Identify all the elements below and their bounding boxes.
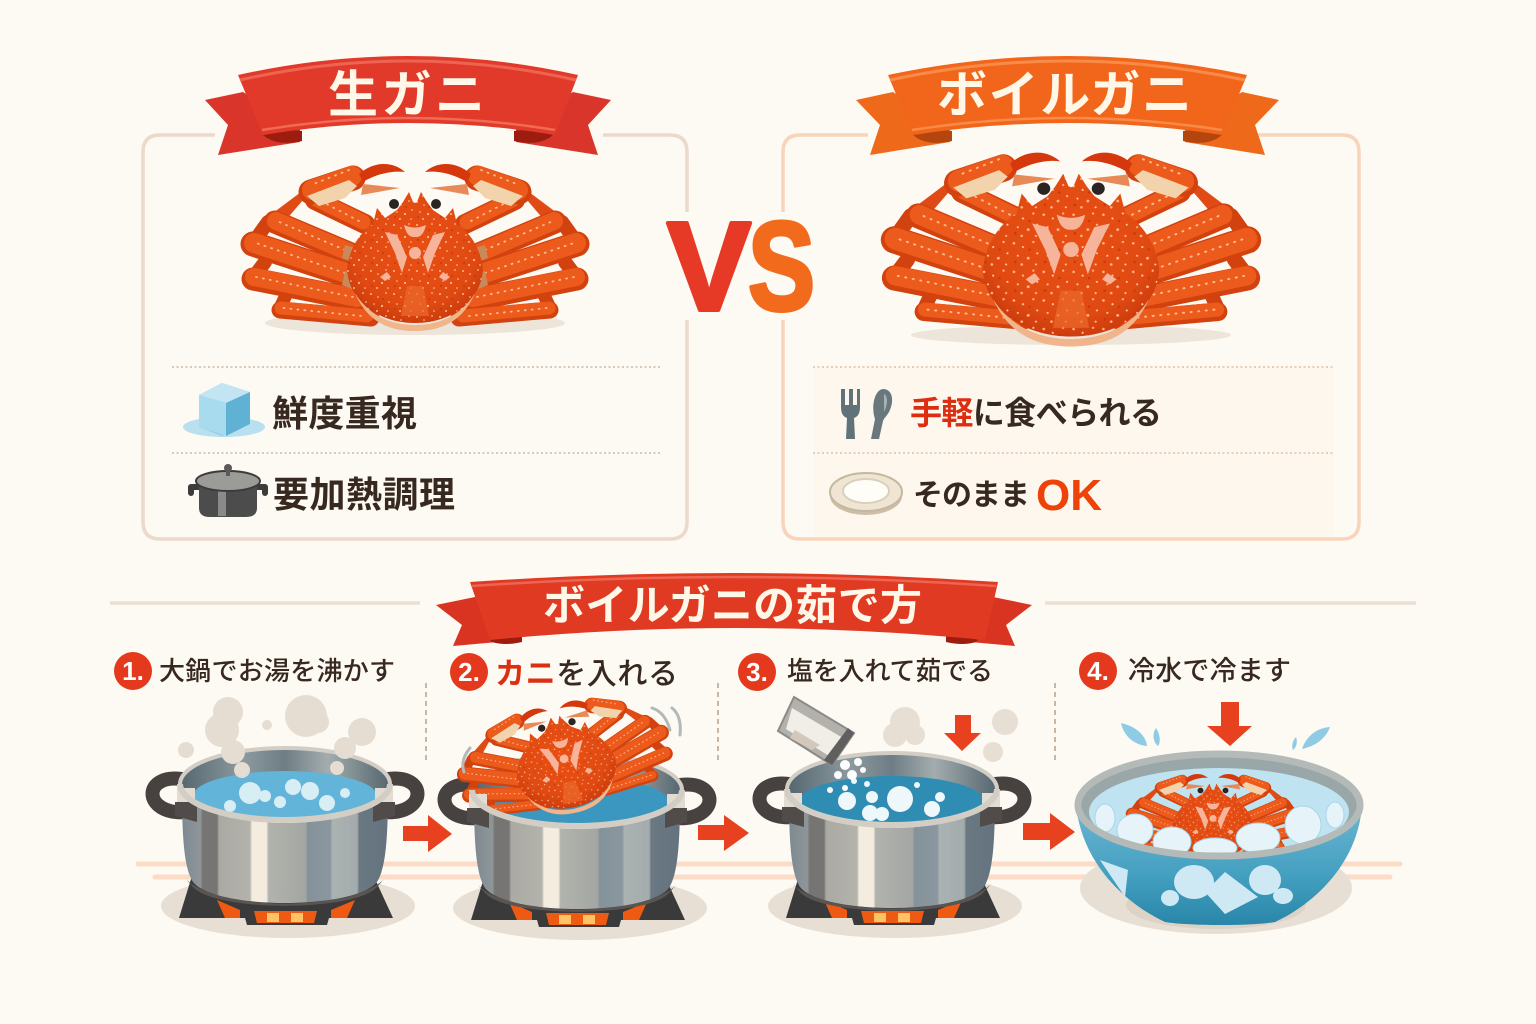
icon: fork and spoon xyxy=(841,389,892,439)
steam xyxy=(870,707,1018,765)
text: 手軽に食べられる: 手軽に食べられる xyxy=(910,395,1162,431)
crab: boiled xyxy=(894,153,1248,346)
bowl rim xyxy=(1078,754,1360,856)
arrow 2 xyxy=(698,815,749,851)
letter V: V xyxy=(667,196,751,337)
water splashes xyxy=(1121,723,1330,750)
text: OK: OK xyxy=(1036,471,1102,520)
crab in bowl xyxy=(1132,774,1294,863)
steam xyxy=(178,695,376,778)
step number 2: 2. xyxy=(458,657,480,687)
section rules xyxy=(110,601,1416,605)
bowl back and water xyxy=(1076,753,1362,857)
pot with water xyxy=(760,753,1024,911)
step number 4 xyxy=(1079,652,1117,690)
bowl shadow xyxy=(1080,842,1352,934)
salt grains xyxy=(827,758,866,793)
step number 4: 4. xyxy=(1087,656,1109,686)
pot front xyxy=(467,790,687,912)
text: 要加熱調理: 要加熱調理 xyxy=(273,474,455,515)
pot back xyxy=(444,754,710,827)
down arrow xyxy=(944,715,981,751)
down arrow xyxy=(1207,702,1252,746)
card frame xyxy=(143,135,687,539)
card edge gaps behind VS xyxy=(682,212,788,320)
panel: boiled crab xyxy=(783,56,1359,539)
icon: plate xyxy=(830,473,902,515)
burner and shadow xyxy=(161,874,415,938)
crab dropped into pot xyxy=(454,684,674,834)
step number 1 xyxy=(114,652,152,690)
title: ボイルガニ: ボイルガニ xyxy=(937,67,1192,123)
card frame xyxy=(783,135,1359,539)
crab: raw xyxy=(253,164,577,335)
motion marks xyxy=(463,708,680,772)
title: ボイルガニの茹で方: ボイルガニの茹で方 xyxy=(543,582,922,629)
pot with water xyxy=(152,748,418,906)
step number 3: 3. xyxy=(746,657,768,687)
step number 2 xyxy=(450,653,488,691)
text: 鮮度重視: 鮮度重視 xyxy=(272,393,417,434)
step 1: boil water xyxy=(114,652,418,938)
step divider lines xyxy=(426,683,1055,760)
row highlight and dividers xyxy=(813,367,1333,537)
table lines xyxy=(138,864,1400,877)
burner and shadow xyxy=(453,876,707,940)
step 3: salt and boil xyxy=(738,653,1024,938)
salted water xyxy=(800,776,984,826)
ice in bowl xyxy=(1100,860,1293,914)
panel: raw crab xyxy=(143,56,687,539)
arrow 1 xyxy=(403,815,452,852)
bowl body xyxy=(1076,805,1362,925)
divider rows: raw xyxy=(172,367,662,453)
text: そのまま: そのまま xyxy=(913,479,1030,512)
section heading ribbon xyxy=(436,573,1032,646)
icon: ice cube xyxy=(183,383,265,437)
title: 生ガニ: 生ガニ xyxy=(328,67,485,123)
arrow 3 xyxy=(1023,813,1075,850)
step number 1: 1. xyxy=(122,656,144,686)
icon: cooking pot xyxy=(191,464,265,517)
label: 塩を入れて茹でる: 塩を入れて茹でる xyxy=(787,656,993,686)
boiling water xyxy=(193,771,377,821)
label: 大鍋でお湯を沸かす: 大鍋でお湯を沸かす xyxy=(159,656,395,686)
step 4: cool in ice water xyxy=(1076,652,1362,934)
ice on top xyxy=(1095,802,1344,858)
ribbon: 生ガニ xyxy=(205,56,611,155)
salt shaker xyxy=(778,697,854,765)
step 2: add crab xyxy=(444,653,710,940)
label: 冷水で冷ます: 冷水で冷ます xyxy=(1128,656,1291,686)
VS mark xyxy=(667,196,815,337)
burner and shadow xyxy=(768,874,1022,938)
text: そのまま OK xyxy=(913,471,1102,520)
letter S: S xyxy=(748,196,815,337)
step number 3 xyxy=(738,653,776,691)
label: カニを入れる: カニを入れる xyxy=(495,658,678,691)
ribbon: ボイルガニ xyxy=(856,56,1279,155)
